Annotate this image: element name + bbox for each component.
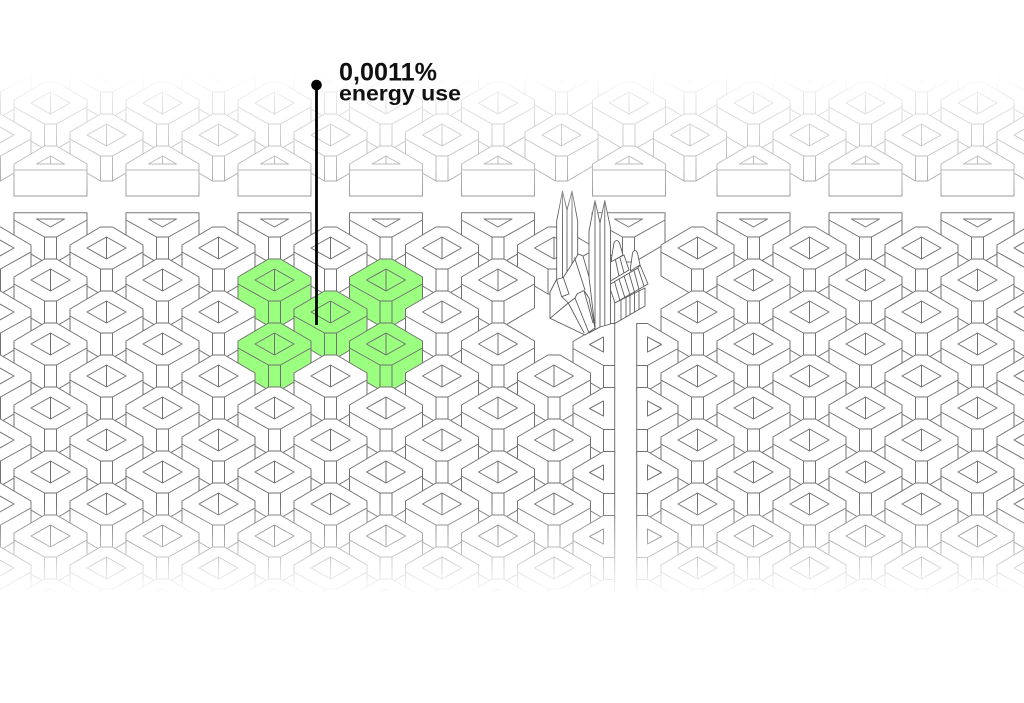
callout text: 0,0011%: [339, 58, 437, 86]
callout text: [339, 58, 461, 106]
upper city block of hexagonal buildings: [0, 50, 1024, 196]
top fade overlay: [0, 0, 1024, 235]
right spires: [589, 200, 610, 333]
callout text: energy use: [339, 82, 461, 106]
cathedral illustration: [550, 191, 648, 335]
nave and turrets: [610, 240, 648, 324]
left spires: [557, 191, 578, 290]
callout pin: [311, 80, 322, 325]
green building 2: [350, 259, 422, 326]
green building 4: [238, 323, 311, 390]
green building 1: [238, 259, 311, 326]
green building 3: [294, 291, 367, 358]
bottom fade overlay: [0, 500, 1024, 703]
transept: [550, 254, 595, 335]
green building 5: [350, 323, 422, 390]
lower city block of hexagonal buildings with highlighted cluster: [0, 213, 1024, 646]
